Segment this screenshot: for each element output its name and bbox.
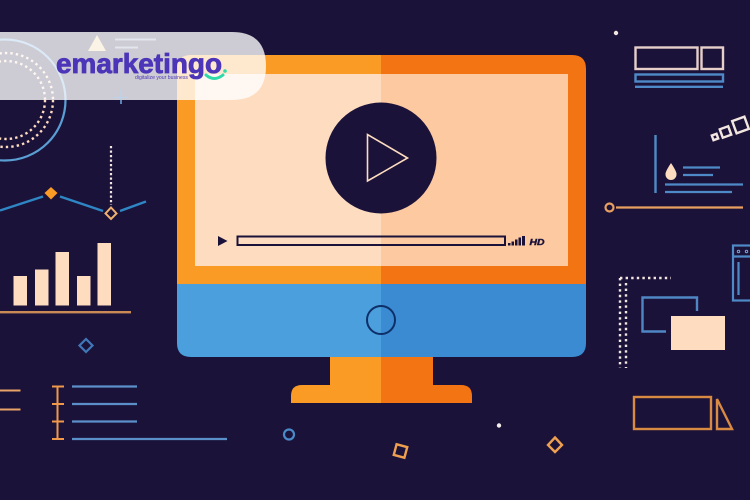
orange diamond bottom right xyxy=(548,438,562,452)
orange bracket xyxy=(52,386,64,439)
outlined rectangles xyxy=(636,48,723,69)
logo wordmark: emarketingo xyxy=(56,48,222,79)
logo xyxy=(56,48,227,81)
logo tagline: digitalize your business xyxy=(135,75,188,81)
browser window icon xyxy=(733,246,750,300)
orange diamond xyxy=(44,187,58,200)
dotted corner xyxy=(620,278,671,368)
line chart xyxy=(0,146,146,219)
left edge dashes xyxy=(0,390,20,410)
logo smile xyxy=(206,75,223,78)
play button xyxy=(326,102,436,214)
signal bars xyxy=(508,236,525,246)
monitor screen xyxy=(195,74,568,266)
banner overlay highlights xyxy=(88,35,156,104)
blue text lines xyxy=(72,386,227,439)
small white dot xyxy=(497,423,501,428)
line segments xyxy=(0,196,146,211)
blue bracket frame xyxy=(642,298,697,332)
blue bars xyxy=(635,74,723,87)
video player controls xyxy=(218,236,545,247)
bar chart axis xyxy=(0,311,131,313)
layout wireframe xyxy=(635,48,723,87)
HD label: HD xyxy=(530,238,545,247)
small dot top right xyxy=(614,31,618,35)
bar chart xyxy=(0,243,131,313)
bracket and text lines xyxy=(52,386,227,439)
cream rectangle xyxy=(671,316,725,350)
orange outlined triangle xyxy=(717,399,732,429)
icon: water drop xyxy=(665,163,677,180)
monitor stand xyxy=(291,350,472,403)
monitor power button xyxy=(367,306,395,334)
rotated squares xyxy=(712,117,749,140)
top short lines xyxy=(115,40,156,48)
small play icon xyxy=(218,236,228,246)
drop chart panel xyxy=(656,135,743,193)
logo banner background xyxy=(0,32,266,100)
monitor frame xyxy=(177,55,586,284)
outlined diamond xyxy=(106,208,116,219)
blue diamond xyxy=(80,339,92,352)
progress bar xyxy=(238,236,505,245)
small blue circle xyxy=(284,430,294,440)
concentric circles xyxy=(0,40,66,160)
vertical rule xyxy=(654,135,657,193)
orange outlined rectangle xyxy=(634,397,711,429)
monitor xyxy=(177,55,586,403)
top triangle xyxy=(88,35,106,51)
dotted guide xyxy=(110,146,112,205)
monitor chin xyxy=(177,284,586,357)
small orange square xyxy=(394,444,407,458)
plus tail below banner xyxy=(120,100,122,104)
text lines xyxy=(665,168,743,192)
orange slider xyxy=(606,204,743,212)
logo accent dot xyxy=(223,69,227,73)
plus icon xyxy=(114,90,128,100)
